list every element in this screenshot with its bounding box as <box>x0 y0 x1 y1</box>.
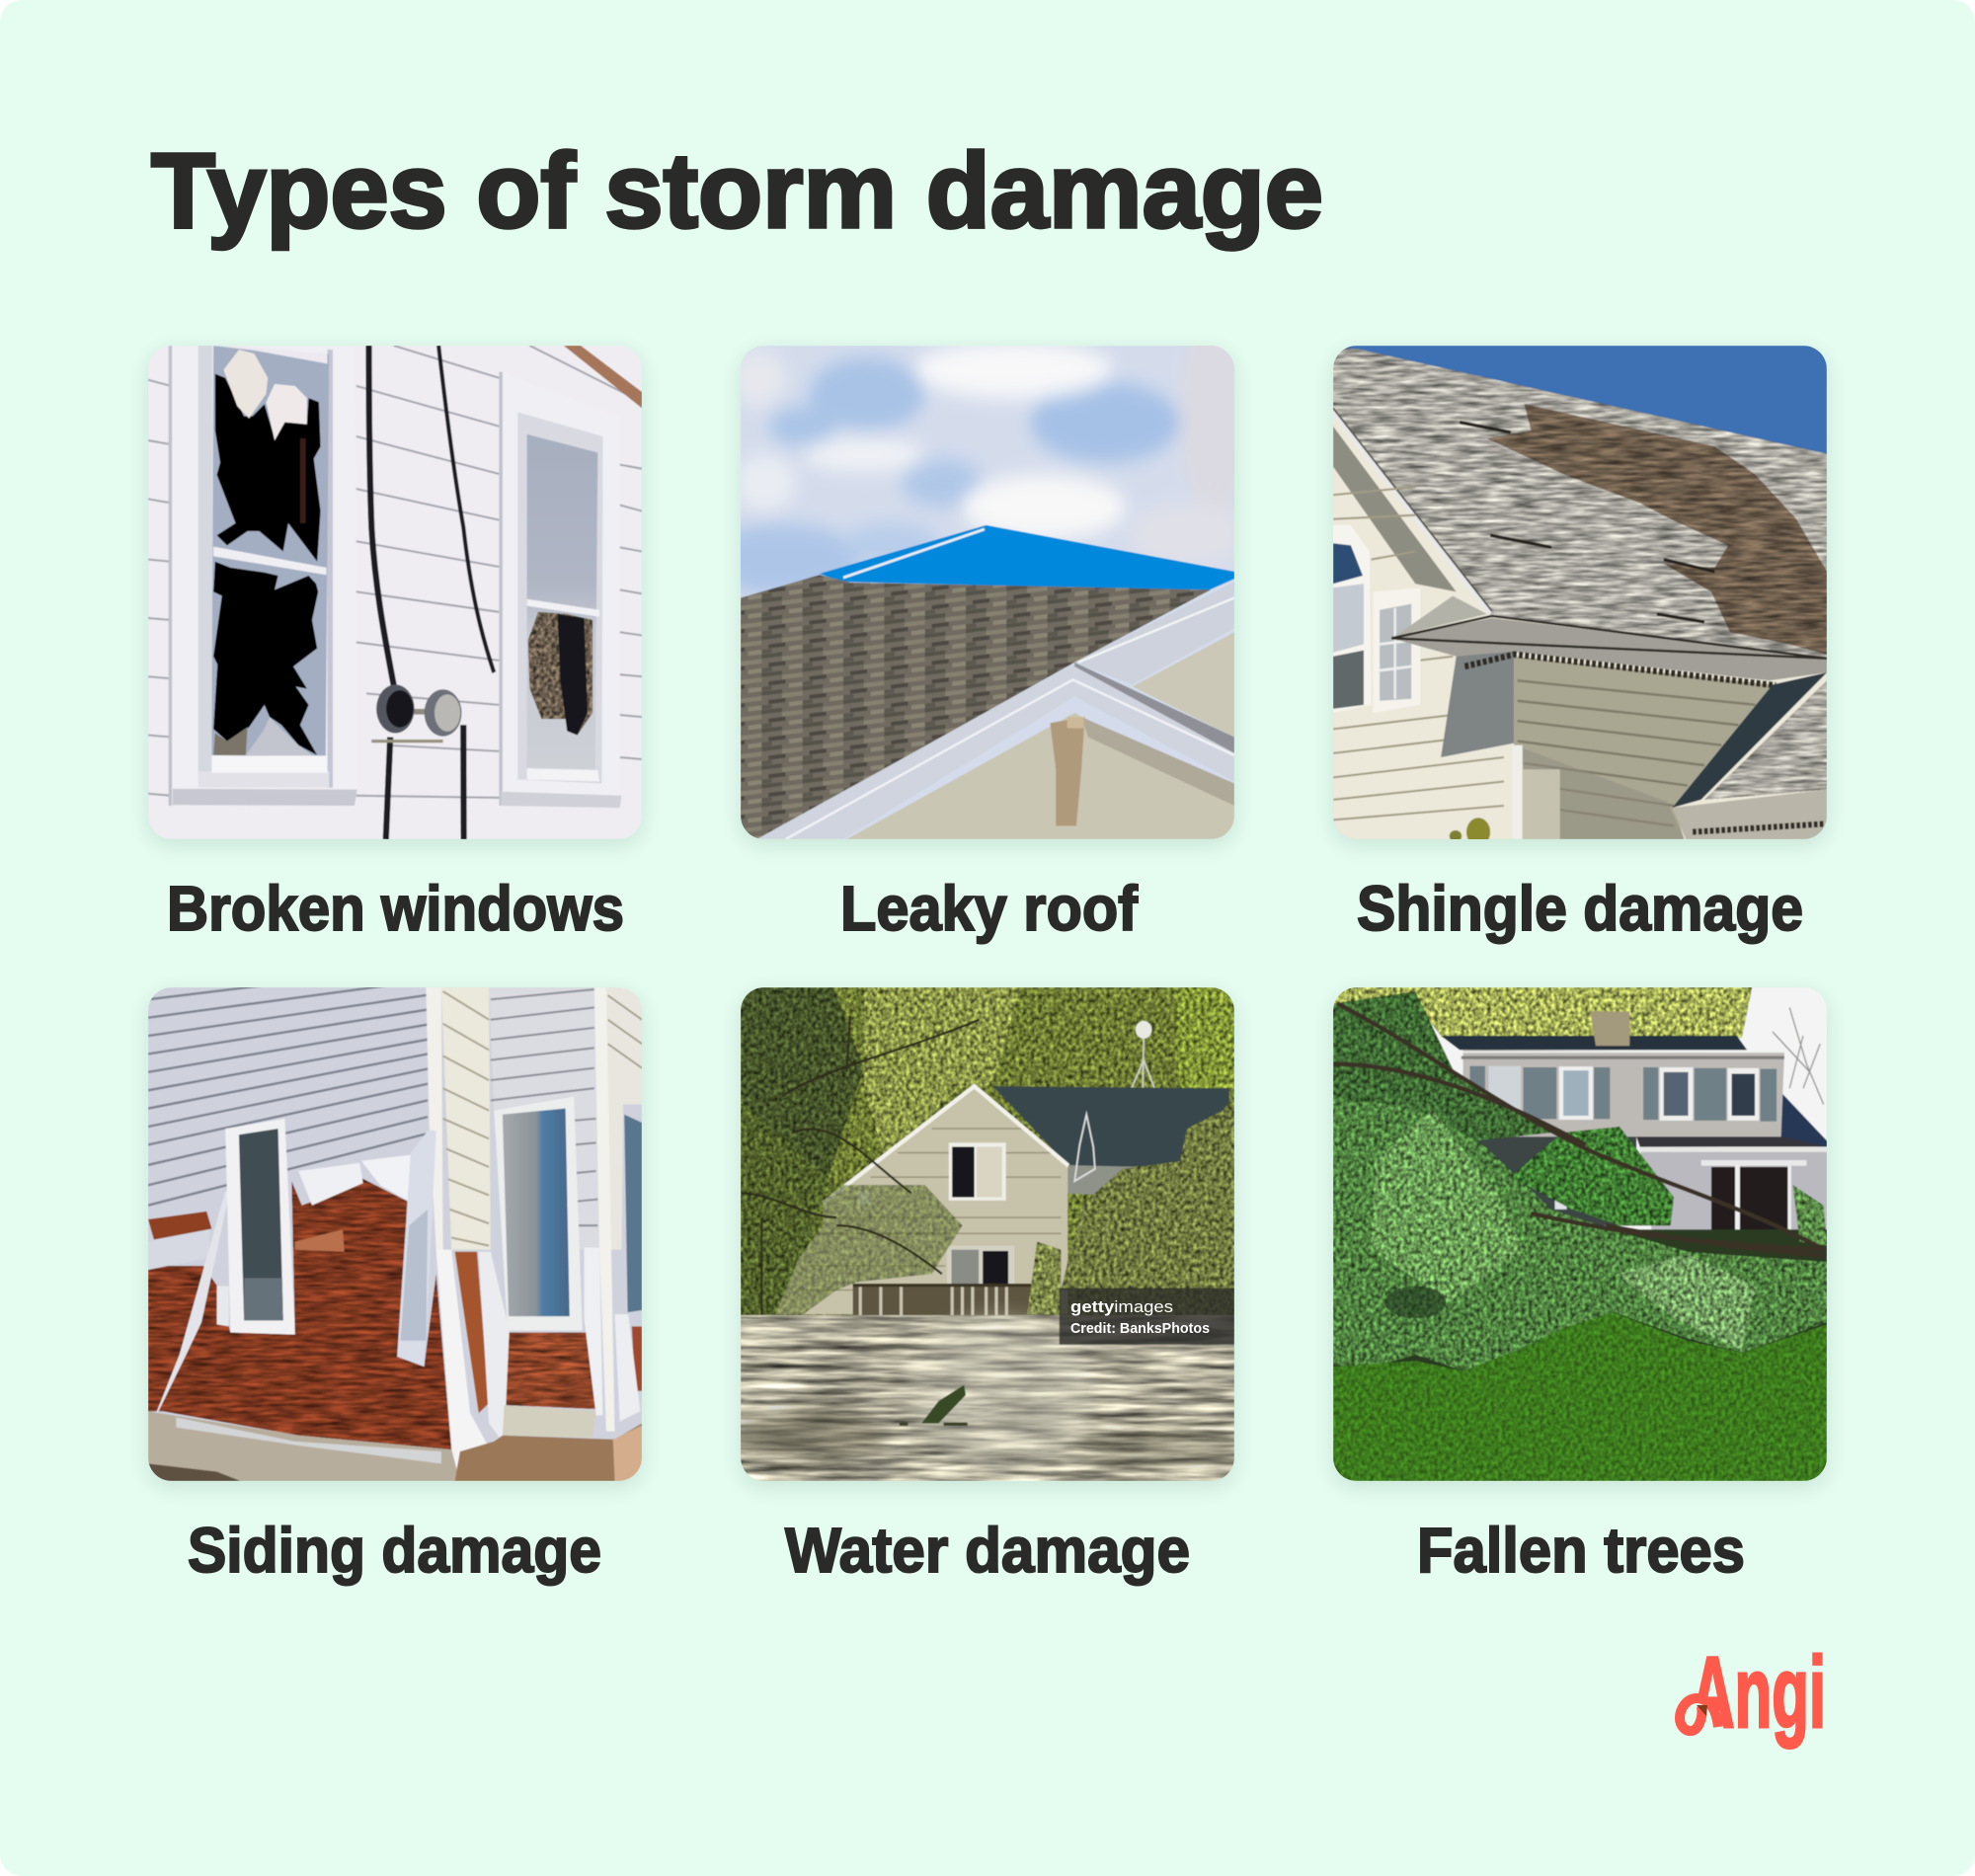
photo: torn house siding <box>148 966 642 1481</box>
icon: right window <box>494 1096 583 1330</box>
icon: wood bracket <box>1050 717 1085 825</box>
label: shingle damage: Shingle damage <box>1357 873 1803 944</box>
icon: lower roof valley <box>1672 672 1827 808</box>
label: water damage: Water damage <box>785 1515 1190 1586</box>
icon: right window frame <box>499 372 621 808</box>
icon: flood water <box>728 1314 1234 1481</box>
foreground branches <box>741 1100 963 1330</box>
icon: shingled roof <box>741 575 1211 839</box>
label: siding damage: Siding damage <box>188 1515 601 1586</box>
icon: deck railing <box>853 1284 1054 1315</box>
icon: exposed sheathing <box>148 1177 451 1449</box>
panel: fallen trees <box>1333 987 1827 1586</box>
icon: satellite dish <box>1131 1021 1154 1100</box>
icon: lawn <box>1333 1312 1827 1481</box>
watermark: getty credit: gettyimages <box>1070 1297 1173 1316</box>
photo: tree fallen in front of house <box>1333 987 1827 1481</box>
panel: water damage <box>728 987 1234 1586</box>
panel: siding damage <box>148 966 642 1586</box>
photo: flooded house <box>728 987 1234 1481</box>
photo: house with shattered windows <box>148 346 642 839</box>
panel: leaky roof <box>735 346 1240 944</box>
label: broken windows: Broken windows <box>167 873 624 944</box>
icon: left window <box>225 1119 295 1335</box>
wall and trim <box>846 713 1234 839</box>
icon: cables and meter <box>369 346 494 839</box>
foundation <box>148 1411 460 1481</box>
title: Types of storm damage <box>151 130 1323 250</box>
icon: blue tarp <box>820 525 1234 591</box>
icon: left window frame <box>169 346 356 806</box>
logo: Angi: Angi <box>1691 1636 1826 1749</box>
icon: torn siding flaps <box>298 1163 363 1206</box>
photo: damaged shingle roof <box>1333 346 1827 846</box>
panel: broken windows <box>148 346 642 944</box>
logo: Angi <box>1679 1636 1826 1749</box>
label: fallen trees: Fallen trees <box>1417 1515 1745 1586</box>
white trim <box>436 1250 489 1472</box>
panel: shingle damage <box>1333 346 1827 944</box>
icon: fascia and shaded wall <box>1441 649 1514 757</box>
icon: weathered roof <box>1333 348 1827 661</box>
watermark: getty credit <box>1070 1297 1210 1337</box>
icon: house <box>775 1086 1229 1315</box>
photo: roof with blue tarp <box>741 346 1234 839</box>
watermark: getty credit: Credit: BanksPhotos <box>1070 1320 1210 1337</box>
icon: fallen tree foliage <box>1333 991 1827 1370</box>
icon: left gable and window <box>1333 427 1457 591</box>
label: leaky roof: Leaky roof <box>840 873 1139 944</box>
icon: house <box>1333 1009 1827 1383</box>
